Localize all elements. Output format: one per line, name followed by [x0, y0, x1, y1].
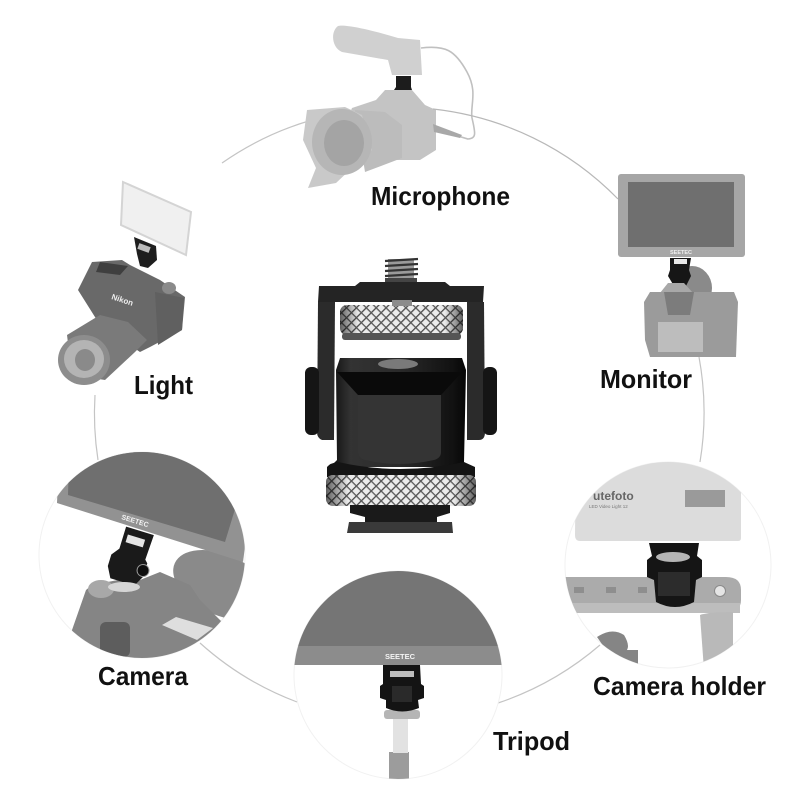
icon: viewfinder [664, 292, 694, 315]
icon: shotgun microphone [333, 26, 422, 75]
collar [327, 462, 475, 477]
icon: camera lens behind [672, 266, 712, 310]
screw [385, 259, 418, 283]
text: light model: LED Video Light 12 [589, 504, 628, 509]
body top highlight [378, 359, 418, 369]
icon: holder arm [560, 577, 741, 613]
icon: camera grip [155, 292, 184, 345]
icon: mini mount [647, 543, 702, 607]
label: Camera holder: Camera holder [593, 671, 766, 701]
panel: light on camera [58, 182, 191, 385]
connecting ring [94, 120, 704, 703]
body bevel [337, 372, 462, 395]
icon: camera body rear [644, 292, 738, 357]
front face [358, 395, 441, 464]
top plate [318, 282, 484, 302]
label: Monitor: Monitor [600, 364, 692, 394]
circle outline [565, 462, 771, 668]
icon: monitor bezel [57, 452, 245, 562]
icon: monitor screen [628, 182, 734, 247]
icon: camera mode dial [162, 282, 176, 294]
ring through camera [433, 109, 618, 199]
icon: display window [685, 490, 725, 507]
icon: camera top LCD [162, 617, 213, 640]
right knob [483, 367, 497, 435]
icon: microphone mount [394, 76, 412, 90]
icon: arm markings [574, 587, 647, 593]
icon: tripod silver pole [393, 716, 408, 753]
icon: monitor bezel [290, 646, 506, 665]
icon: monitor screen [68, 452, 235, 542]
left arm [317, 302, 335, 440]
icon: mini mount [380, 665, 424, 712]
neck [350, 505, 450, 524]
circle outline [39, 452, 245, 658]
logo: SEETEC: SEETEC [385, 652, 416, 661]
panel: camera holder circle [560, 450, 771, 670]
swivel body [330, 358, 467, 467]
logo: SEETEC: SEETEC [120, 514, 149, 529]
icon: arm screw [714, 586, 726, 596]
icon: mini mount [134, 237, 157, 268]
right arm [467, 302, 485, 440]
icon: camera flip screen [433, 124, 462, 138]
label: Light: Light [134, 370, 193, 400]
logo: Nikon: Nikon [110, 292, 134, 308]
panel: monitor on camera [618, 174, 745, 357]
icon: camera body [72, 572, 221, 658]
icon: monitor screen [298, 571, 498, 646]
icon: mount silver ring [108, 582, 140, 592]
panel: microphone on camera [303, 26, 618, 199]
logo: SEETEC: SEETEC [670, 250, 692, 256]
icon: camera body [78, 260, 185, 352]
upper knurled wheel [340, 300, 463, 340]
icon: LED light panel [575, 462, 741, 541]
icon: top LCD [96, 262, 128, 275]
icon: microphone cable [421, 47, 475, 139]
icon: camera dial [88, 580, 114, 598]
icon: DSLR camera body [345, 90, 436, 168]
icon: lens front [58, 335, 110, 385]
lower knurled ring [326, 475, 476, 506]
circle outline [294, 571, 502, 779]
icon: lens hood [303, 107, 372, 188]
icon: silver ring [384, 710, 420, 719]
icon: lens glass [312, 109, 372, 175]
left knob [305, 367, 319, 435]
label: Camera: Camera [98, 661, 188, 691]
icon: lens barrel [355, 110, 402, 172]
icon: eyecup [100, 622, 130, 657]
panel: camera circle [38, 452, 246, 658]
icon: rear LCD [658, 322, 703, 352]
icon: camera hot shoe [660, 283, 693, 293]
icon: camera lens [173, 550, 245, 618]
icon: handle shape [597, 632, 638, 664]
central product: hot shoe mount [305, 259, 497, 533]
label: Tripod: Tripod [493, 726, 570, 756]
panel: tripod circle [290, 565, 506, 782]
icon: mini mount [668, 258, 691, 286]
label: Microphone: Microphone [371, 181, 510, 211]
icon: holder tube [700, 613, 733, 662]
icon: monitor bezel [618, 174, 745, 257]
icon: mini mount [105, 525, 160, 589]
icon: lens barrel [67, 315, 147, 380]
hot shoe foot [347, 522, 453, 533]
logo: utefoto: utefoto [593, 489, 634, 503]
icon: LED light panel [121, 182, 191, 255]
icon: tripod lower pole [389, 752, 409, 782]
